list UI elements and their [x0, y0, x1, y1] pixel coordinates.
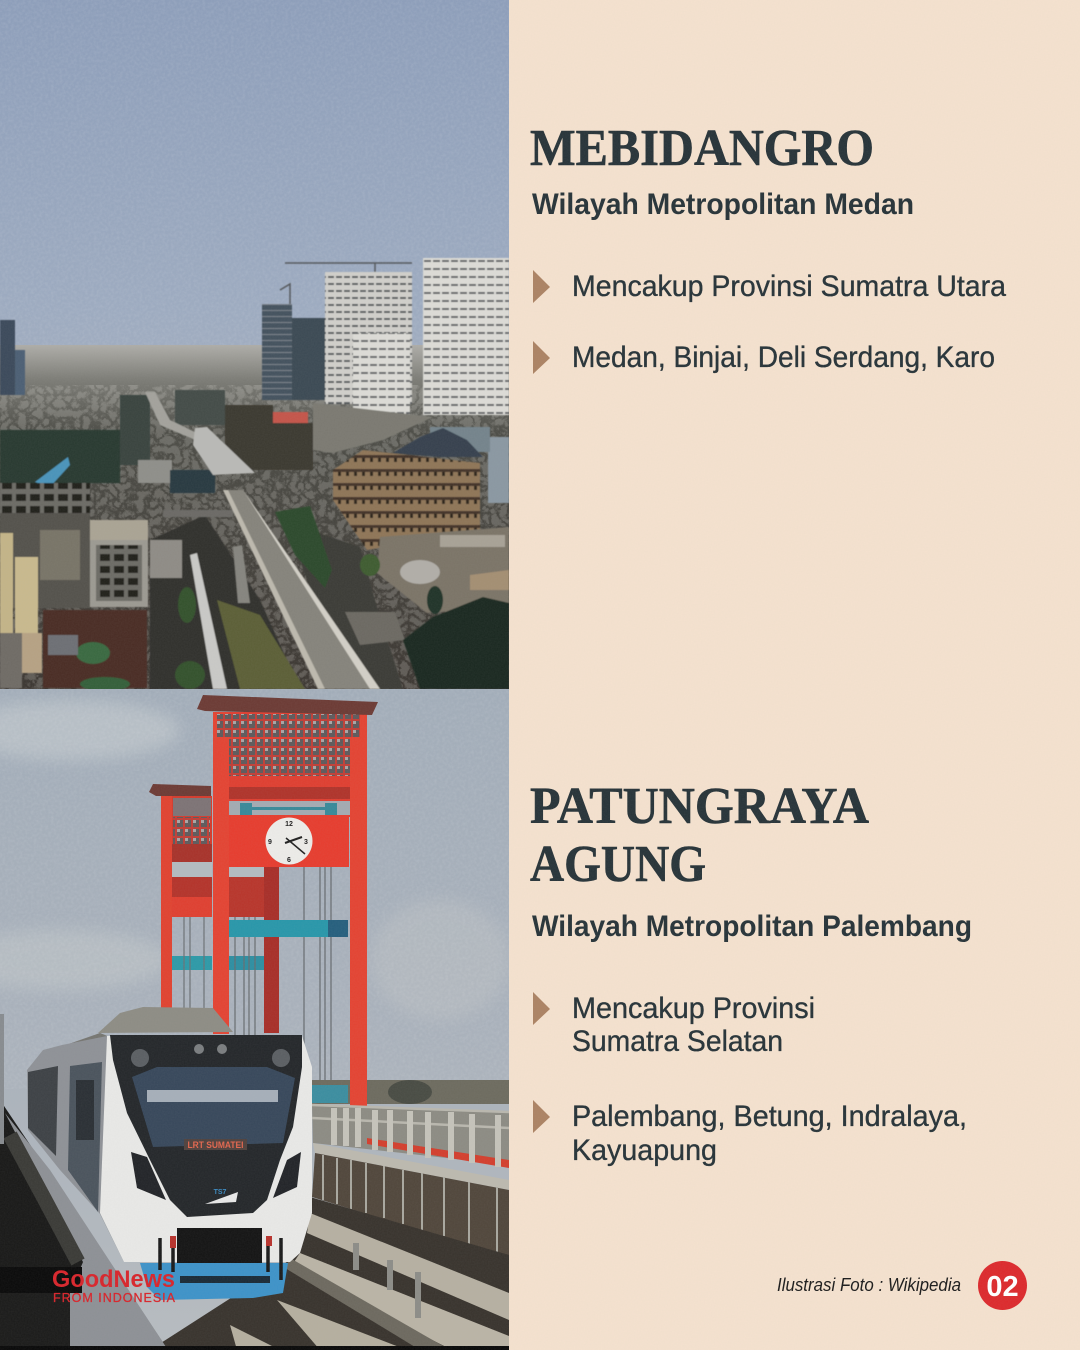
logo: GoodNews from Indonesia: GoodNews [52, 1266, 175, 1293]
far horizon [312, 1080, 509, 1104]
street and rail yard [150, 517, 284, 689]
red roofs [43, 610, 147, 688]
red roof [273, 412, 308, 423]
train: LRT SUMATEI [188, 1140, 244, 1150]
background panel [509, 0, 1080, 1350]
trees right [403, 597, 509, 689]
page number badge: 02 [986, 1271, 1019, 1303]
icon: clock: 9 [268, 839, 272, 846]
bullet: province [533, 992, 815, 1058]
heading: Patungraya Agung [530, 778, 869, 893]
front tower [197, 695, 378, 1104]
central towers [262, 304, 292, 400]
icon: clock: 3 [304, 839, 308, 846]
subheading: Palembang: Wilayah Metropolitan Palembang [532, 910, 972, 943]
photo credit: Ilustrasi Foto : Wikipedia [777, 1275, 961, 1295]
icon: clock [266, 818, 312, 864]
photo: Medan city skyline [0, 0, 509, 691]
section: Mebidangro [530, 120, 1006, 374]
page number badge [978, 1261, 1027, 1310]
viaduct [223, 490, 380, 689]
heading: Mebidangro: MEBIDANGRO [530, 120, 874, 177]
left towers [0, 320, 15, 395]
train [27, 1007, 312, 1300]
deck railing [312, 1104, 509, 1258]
forest left [0, 430, 120, 483]
back tower [149, 784, 212, 1010]
bullet: province: Sumatra Selatan [572, 1025, 783, 1058]
icon: clock: 6 [287, 857, 291, 864]
grey office block [89, 540, 148, 608]
heading: Patungraya Agung: AGUNG [530, 836, 706, 893]
heading: Patungraya Agung: PATUNGRAYA [530, 778, 869, 835]
bullet: cities: Kayuapung [572, 1134, 717, 1167]
track slabs [150, 1197, 509, 1350]
bullet: province: Mencakup Provinsi [572, 992, 815, 1025]
bullet: province: Mencakup Provinsi Sumatra Utara [572, 270, 1006, 303]
left cream buildings [0, 533, 13, 633]
long train [190, 553, 227, 689]
trees beside viaduct [275, 506, 332, 588]
station [138, 460, 172, 483]
logo: GoodNews from Indonesia [52, 1266, 176, 1305]
logo: GoodNews from Indonesia: FROM INDONESIA [53, 1291, 176, 1305]
subheading: Medan: Wilayah Metropolitan Medan [532, 188, 914, 221]
section: Patungraya Agung [530, 778, 972, 1167]
photo: Ampera bridge and LRT train [0, 689, 510, 1350]
left platform [0, 1014, 168, 1350]
temple [333, 450, 480, 550]
crane [280, 263, 412, 304]
smoke and low roofs [377, 527, 509, 613]
bullet: cities: Medan, Binjai, Deli Serdang, Karo [572, 341, 995, 374]
train: TS7 [214, 1189, 227, 1196]
icon: clock: 12 [285, 821, 293, 828]
bullet: cities [533, 1100, 967, 1167]
concrete wall [313, 403, 433, 453]
bullet: cities: Palembang, Betung, Indralaya, [572, 1100, 967, 1133]
